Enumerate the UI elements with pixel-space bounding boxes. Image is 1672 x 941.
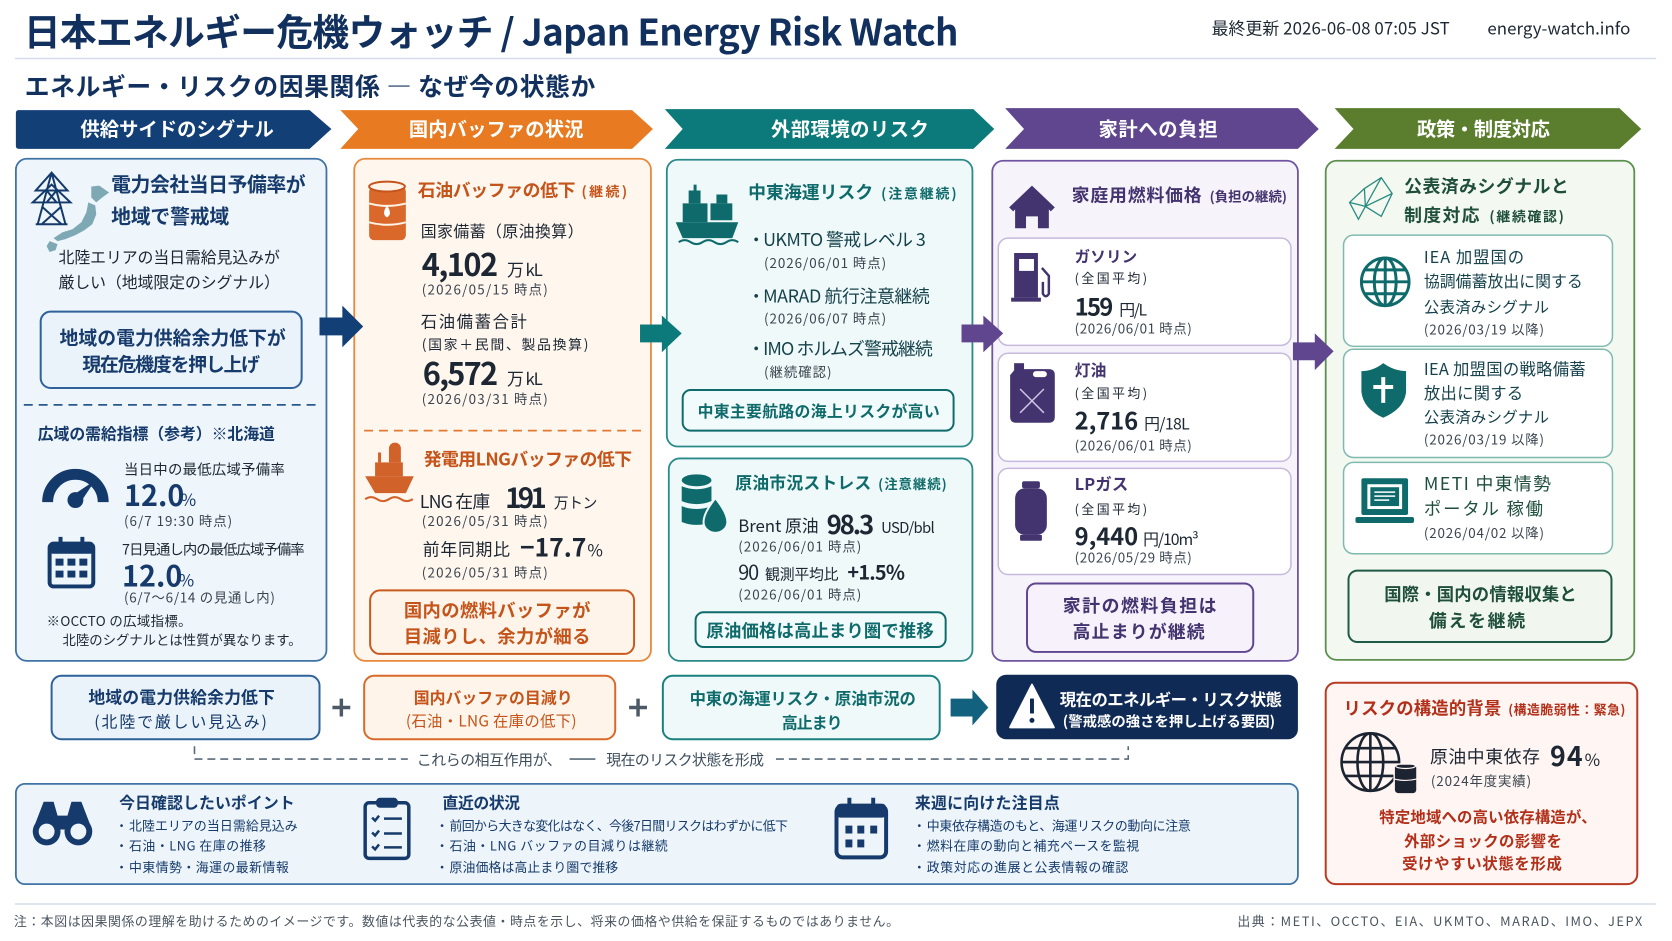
chevron: external xyxy=(665,109,994,149)
metric: vs average: (2026/06/01 時点) xyxy=(738,583,861,603)
metric: year on year: (2026/05/31 時点) xyxy=(422,562,548,582)
note xyxy=(47,610,302,649)
icon: japan map xyxy=(47,186,109,252)
price: (全国平均) xyxy=(1075,499,1147,518)
callout: 原油価格は高止まり圏で推移 xyxy=(707,617,934,642)
column: recent: ・ xyxy=(436,816,449,835)
sub heading: 広域の需給指標（参考）※北海道 xyxy=(38,422,275,445)
metric: year on year xyxy=(422,529,603,582)
price: (全国平均) xyxy=(1075,268,1147,287)
metric: vs average: +1.5% xyxy=(847,557,905,586)
icon: globe xyxy=(1361,258,1409,306)
heading: 発電用LNGバッファの低下 xyxy=(424,445,632,471)
panel: points to check xyxy=(16,784,1298,884)
text: (2026/03/19 以降) xyxy=(1424,429,1544,449)
metric: 7 days: (6/7～6/14 の見通し内) xyxy=(124,586,275,606)
price: ガソリン xyxy=(1075,245,1137,267)
result box: 現在のエネルギー・リスク状態 xyxy=(1060,687,1282,711)
metric: brent: USD/bbl xyxy=(881,517,935,538)
metric: today: 12.0 xyxy=(124,474,184,515)
metric: national stock: 万 kL xyxy=(507,256,543,281)
arrow xyxy=(1293,333,1334,370)
chevron: external: 外部環境のリスク xyxy=(771,114,929,142)
text: 放出に関する xyxy=(1424,380,1523,404)
callout xyxy=(696,612,946,647)
chevron: buffer xyxy=(340,110,653,149)
icon: oil barrel xyxy=(369,182,406,240)
heading: (注意継続) xyxy=(881,183,957,203)
icon: clipboard xyxy=(365,798,409,858)
sources: 出典：METI、OCCTO、EIA、UKMTO、MARAD、IMO、JEPX xyxy=(1237,911,1643,930)
icon: gauge xyxy=(48,474,103,508)
price: (2026/06/01 時点) xyxy=(1075,317,1192,337)
column: today: 石油・LNG 在庫の推移 xyxy=(129,835,266,854)
metric: brent: (2026/06/01 時点) xyxy=(738,536,861,556)
panel: supply signals xyxy=(16,159,326,661)
heading: (継続) xyxy=(581,181,627,201)
price: (2026/06/01 時点) xyxy=(1075,435,1192,455)
metric: lng stock: 万トン xyxy=(554,492,597,513)
card: METI portal xyxy=(1344,462,1612,554)
heading: (構造脆弱性：緊急) xyxy=(1508,699,1625,718)
callout: 国際・国内の情報収集と xyxy=(1384,580,1577,605)
text: (2026/04/02 以降) xyxy=(1424,522,1544,542)
panel: domestic buffers xyxy=(354,159,651,661)
heading: 家庭用燃料価格 xyxy=(1072,181,1202,207)
column: today: ・ xyxy=(115,816,128,835)
heading: 制度対応 xyxy=(1404,201,1480,227)
column: today: 北陸エリアの当日需給見込み xyxy=(129,816,298,835)
price: 9,440 xyxy=(1075,517,1138,552)
panel heading: 電力会社当日予備率が xyxy=(111,169,306,198)
callout: 目減りし、余力が細る xyxy=(404,623,590,649)
flow: cause 1: 地域の電力供給余力低下 xyxy=(88,684,275,709)
metric: today: (6/7 19:30 時点) xyxy=(124,510,232,530)
icon: calendar xyxy=(50,537,93,586)
flow: cause 3: 中東の海運リスク・原油市況の xyxy=(690,686,916,710)
column: today xyxy=(115,791,298,876)
price xyxy=(1075,245,1192,337)
column: today: ・ xyxy=(115,857,128,876)
chevron: household: 家計への負担 xyxy=(1098,114,1218,142)
item: MARAD: ・ xyxy=(747,283,765,309)
flow: cause 2: (石油・LNG 在庫の低下) xyxy=(406,709,577,731)
title: 日本エネルギー危機ウォッチ / Japan Energy Risk Watch xyxy=(24,3,959,57)
price xyxy=(1075,358,1192,455)
column: recent: ・ xyxy=(436,857,449,876)
price: 灯油 xyxy=(1075,358,1106,381)
column: recent: 石油・LNG バッファの目減りは継続 xyxy=(450,835,668,854)
metric: today: 当日中の最低広域予備率 xyxy=(124,458,285,479)
panel: household burden xyxy=(992,161,1298,661)
card: gasoline xyxy=(998,238,1291,345)
icon: jerry can xyxy=(1010,363,1055,423)
column: today: ・ xyxy=(115,835,128,854)
text: 協調備蓄放出に関する xyxy=(1424,269,1583,292)
price: (全国平均) xyxy=(1075,383,1147,402)
heading xyxy=(1404,173,1569,227)
heading: 中東海運リスク xyxy=(748,178,873,204)
metric: 7 days xyxy=(122,539,305,606)
chevron: supply xyxy=(16,110,331,149)
card: IEA strategic stock xyxy=(1344,349,1612,457)
flow: cause 1 xyxy=(52,676,320,739)
metric: total stock: 万 kL xyxy=(507,365,543,390)
text: 公表済みシグナル xyxy=(1424,296,1549,318)
flow: cause 1: (北陸で厳しい見込み) xyxy=(94,709,267,732)
heading: リスクの構造的背景 xyxy=(1344,694,1501,719)
item: IMO xyxy=(747,335,933,381)
description: 北陸エリアの当日需給見込みが xyxy=(59,245,280,268)
price: 159 xyxy=(1075,288,1113,323)
chevron: supply: 供給サイドのシグナル xyxy=(80,114,274,142)
icon: binoculars xyxy=(33,802,92,845)
metric: total stock xyxy=(421,308,588,408)
text: IEA 加盟国の xyxy=(1424,244,1524,268)
heading: 石油バッファの低下 xyxy=(418,176,576,202)
metric: national stock: (2026/05/15 時点) xyxy=(422,279,548,299)
item: UKMTO xyxy=(747,226,926,272)
metric: vs average: 観測平均比 xyxy=(765,564,839,585)
callout xyxy=(1349,571,1611,642)
text: IEA 加盟国の戦略備蓄 xyxy=(1424,356,1586,380)
callout xyxy=(683,390,954,431)
connector: これらの相互作用が、 xyxy=(417,749,562,770)
column: today: 今日確認したいポイント xyxy=(119,791,295,814)
price: 円/10m³ xyxy=(1143,527,1199,550)
arrow xyxy=(962,316,1003,352)
description xyxy=(59,245,280,293)
price: 2,716 xyxy=(1075,402,1138,437)
column: recent: 前回から大きな変化はなく、今後7日間リスクはわずかに低下 xyxy=(450,816,788,835)
header xyxy=(24,3,1630,57)
metric: lng stock xyxy=(420,477,597,530)
metric: today xyxy=(124,458,285,530)
text xyxy=(1424,356,1586,449)
item: UKMTO: UKMTO 警戒レベル 3 xyxy=(763,226,926,252)
text: 公表済みシグナル xyxy=(1424,406,1549,428)
metric: national stock xyxy=(421,219,583,299)
icon: ships xyxy=(676,185,738,244)
metric: total stock: 6,572 xyxy=(423,349,498,394)
callout: 地域の電力供給余力低下が xyxy=(60,323,286,350)
heading xyxy=(1344,694,1625,719)
heading xyxy=(748,178,957,204)
heading: (負担の継続) xyxy=(1210,185,1287,205)
column: recent: ・ xyxy=(436,835,449,854)
column: next week: ・ xyxy=(913,857,926,876)
heading: 公表済みシグナルと xyxy=(1404,173,1569,199)
flow: cause 3 xyxy=(663,676,940,739)
arrow xyxy=(320,306,363,347)
chevron: policy xyxy=(1335,108,1641,149)
flow: cause 2 xyxy=(364,676,615,739)
column: next week: ・ xyxy=(913,816,926,835)
callout xyxy=(370,590,634,654)
icon: fuel pump xyxy=(1011,253,1049,302)
column: recent: 原油価格は高止まり圏で推移 xyxy=(450,857,618,876)
metric: total stock: (2026/03/31 時点) xyxy=(422,388,548,408)
metric: national stock: 国家備蓄（原油換算） xyxy=(421,219,583,242)
metric: total stock: (国家＋民間、製品換算) xyxy=(422,334,588,354)
description: 厳しい（地域限定のシグナル） xyxy=(59,270,280,293)
metric: 94 xyxy=(1550,735,1583,774)
item: MARAD: (2026/06/07 時点) xyxy=(764,307,886,327)
price: (2026/05/29 時点) xyxy=(1075,547,1192,567)
footer note: 注：本図は因果関係の理解を助けるためのイメージです。数値は代表的な公表値・時点を示し、将来の価格や供給を保証するものではありません。 xyxy=(14,911,899,930)
card: IEA coordinated release xyxy=(1344,235,1612,346)
metric: total stock: 石油備蓄合計 xyxy=(421,308,527,332)
item: MARAD xyxy=(747,283,930,327)
column: next week: 中東依存構造のもと、海運リスクの動向に注意 xyxy=(927,816,1191,835)
metric: lng stock: LNG 在庫 xyxy=(420,488,490,514)
icon: calendar xyxy=(836,798,886,857)
text xyxy=(1424,470,1551,542)
icon: power tower xyxy=(33,173,70,224)
price: 円/18L xyxy=(1144,412,1190,435)
metric: 7 days: % xyxy=(179,566,194,591)
text xyxy=(1424,244,1583,338)
panel: structural risk xyxy=(1326,683,1637,884)
column: recent xyxy=(436,791,788,876)
heading: 原油市況ストレス xyxy=(735,469,871,494)
metric: brent: 98.3 xyxy=(827,505,874,542)
connector xyxy=(194,746,1128,770)
text: ポータル 稼働 xyxy=(1424,495,1543,520)
icon: lng ship xyxy=(365,443,414,501)
text: METI 中東情勢 xyxy=(1424,470,1551,496)
column: next week: 来週に向けた注目点 xyxy=(915,791,1060,814)
column: today: 中東情勢・海運の最新情報 xyxy=(129,857,289,876)
item: UKMTO: (2026/06/01 時点) xyxy=(764,252,886,272)
heading: (継続確認) xyxy=(1489,206,1564,226)
price xyxy=(1075,471,1199,567)
note: 北陸のシグナルとは性質が異なります。 xyxy=(63,629,302,649)
metric xyxy=(1430,735,1600,790)
last updated: 最終更新 2026-06-08 07:05 JST xyxy=(1212,15,1450,40)
icon: gas cylinder xyxy=(1015,481,1047,541)
item: IMO: ・ xyxy=(747,335,765,361)
metric: national stock: 4,102 xyxy=(422,240,498,285)
price: LPガス xyxy=(1075,471,1128,495)
icon: house xyxy=(1009,186,1055,228)
icon: shield xyxy=(1361,363,1406,418)
conclusion: 外部ショックの影響を xyxy=(1404,829,1562,851)
arrow xyxy=(640,316,682,352)
icon: warning xyxy=(1010,685,1054,727)
metric: 7 days: 12.0 xyxy=(122,554,182,595)
heading: (注意継続) xyxy=(878,473,947,493)
chevron: household xyxy=(1005,108,1319,149)
arrow xyxy=(951,690,988,725)
icon: barrel and drop xyxy=(682,474,727,533)
panel heading: 地域で警戒域 xyxy=(111,200,229,229)
metric: year on year: % xyxy=(587,537,603,562)
chevron: buffer: 国内バッファの状況 xyxy=(409,114,583,142)
conclusion: 特定地域への高い依存構造が、 xyxy=(1379,806,1597,828)
panel: policy response xyxy=(1326,161,1634,660)
item: UKMTO: ・ xyxy=(747,226,765,252)
callout: 国内の燃料バッファが xyxy=(404,597,590,623)
conclusion xyxy=(1379,806,1597,874)
plus xyxy=(332,699,350,716)
icon: globe and barrel xyxy=(1342,733,1417,794)
metric: vs average: 90 xyxy=(738,557,759,586)
note: ※OCCTO の広域指標。 xyxy=(47,610,192,630)
metric: year on year: 前年同期比 xyxy=(423,536,510,561)
metric: vs average xyxy=(738,557,905,603)
heading xyxy=(735,469,947,494)
column: next week: 燃料在庫の動向と補充ペースを監視 xyxy=(927,835,1139,854)
flow: cause 2: 国内バッファの目減り xyxy=(414,686,573,709)
card: lp gas xyxy=(998,468,1291,575)
metric: % xyxy=(1585,746,1600,771)
metric: lng stock: 191 xyxy=(505,477,547,517)
metric: (2024年度実績) xyxy=(1431,770,1531,790)
flow: cause 3: 高止まり xyxy=(782,710,842,733)
callout: 中東主要航路の海上リスクが高い xyxy=(698,399,940,422)
column: next week xyxy=(913,791,1191,876)
plus xyxy=(629,699,647,716)
icon: laptop xyxy=(1355,478,1414,523)
chevron: policy: 政策・制度対応 xyxy=(1417,114,1550,142)
metric: year on year: −17.7 xyxy=(520,529,586,565)
conclusion: 受けやすい状態を形成 xyxy=(1402,852,1562,874)
item: IMO: (継続確認) xyxy=(764,361,832,381)
callout: 高止まりが継続 xyxy=(1073,618,1205,644)
icon: network gem xyxy=(1350,178,1392,219)
column: next week: ・ xyxy=(913,835,926,854)
text: (2026/03/19 以降) xyxy=(1424,318,1544,338)
column: recent: 直近の状況 xyxy=(443,791,520,814)
price: 円/L xyxy=(1119,298,1147,321)
column: next week: 政策対応の進展と公表情報の確認 xyxy=(927,857,1128,876)
metric: today: % xyxy=(181,486,196,511)
metric: lng stock: (2026/05/31 時点) xyxy=(422,510,548,530)
callout: 家計の燃料負担は xyxy=(1063,592,1217,618)
callout: 現在危機度を押し上げ xyxy=(82,350,260,377)
panel: maritime risk xyxy=(667,160,972,447)
site url: energy-watch.info xyxy=(1487,15,1630,40)
result box: (警戒感の強さを押し上げる要因) xyxy=(1063,710,1275,731)
connector: 現在のリスク状態を形成 xyxy=(606,749,764,770)
item: MARAD: MARAD 航行注意継続 xyxy=(763,283,930,309)
result box xyxy=(996,675,1298,739)
panel heading xyxy=(111,169,306,229)
callout: 備えを継続 xyxy=(1429,607,1525,633)
metric: 原油中東依存 xyxy=(1430,743,1540,769)
card: kerosene xyxy=(998,353,1291,461)
heading xyxy=(1072,181,1287,207)
callout xyxy=(41,312,302,388)
metric: 7 days: 7日見通し内の最低広域予備率 xyxy=(122,539,305,560)
metric: brent: Brent 原油 xyxy=(738,512,819,537)
metric: brent xyxy=(738,505,935,556)
panel: crude market xyxy=(669,458,972,661)
subtitle: エネルギー・リスクの因果関係 — なぜ今の状態か xyxy=(25,67,596,103)
item: IMO: IMO ホルムズ警戒継続 xyxy=(763,335,933,361)
callout xyxy=(1027,583,1253,652)
